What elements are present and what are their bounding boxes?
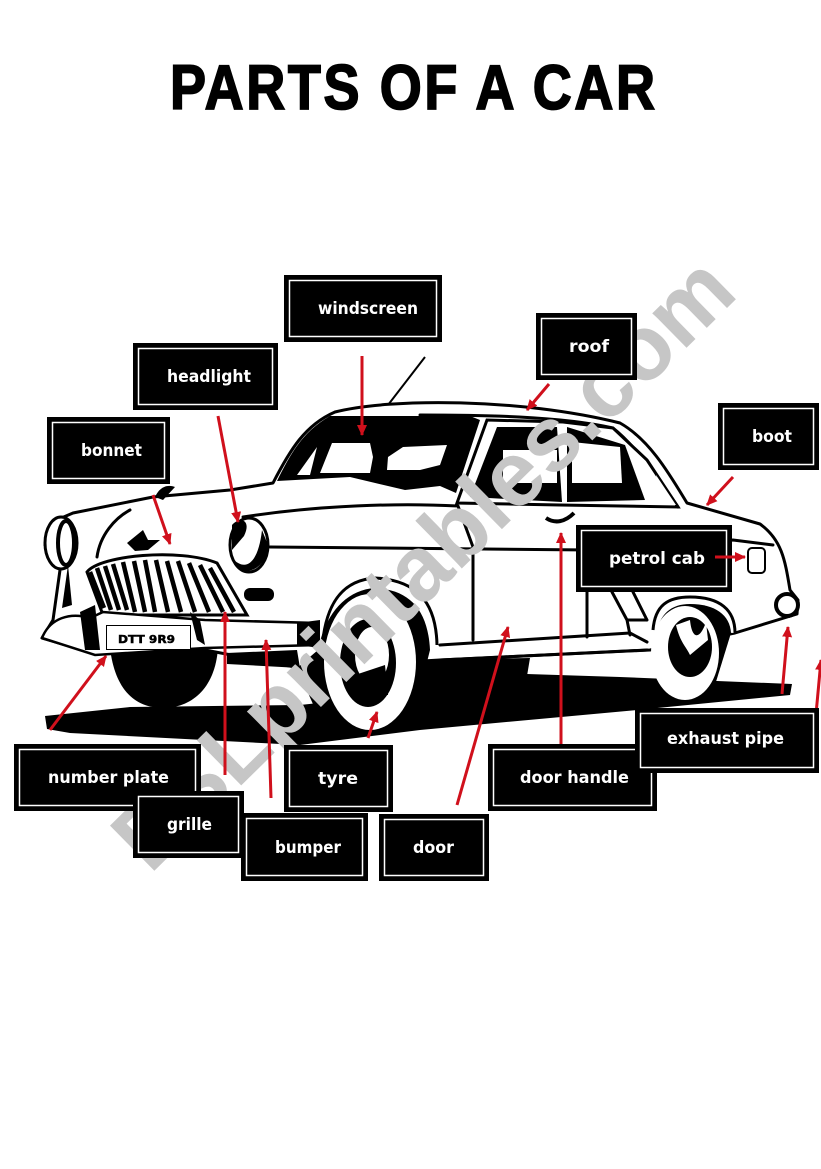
hood ornament xyxy=(127,530,160,551)
label: number plate xyxy=(14,744,201,811)
title: PARTS OF A CAR xyxy=(170,53,655,123)
number plate: DTT 9R9 xyxy=(118,633,175,646)
arrow: bumper xyxy=(266,640,271,798)
label: bumper: bumper xyxy=(275,838,342,858)
label: bonnet xyxy=(47,417,170,484)
label: number plate: number plate xyxy=(48,768,169,788)
label: exhaust pipe: exhaust pipe xyxy=(667,729,784,749)
door handle xyxy=(546,513,574,521)
arrow: roof xyxy=(527,384,549,410)
arrow: number plate xyxy=(50,656,106,730)
arrow: door handle xyxy=(560,533,562,745)
rear quarter glass xyxy=(656,475,676,505)
arrow: windscreen xyxy=(360,356,364,435)
car illustration xyxy=(42,357,798,745)
windscreen frame xyxy=(277,416,480,493)
arrow: exhaust pipe xyxy=(782,627,788,694)
hidden rear-side wheel xyxy=(405,658,530,725)
label: petrol cab xyxy=(576,525,732,592)
label: headlight xyxy=(133,343,278,410)
rear wheel xyxy=(651,597,735,700)
label: grille: grille xyxy=(167,815,212,835)
label: door handle xyxy=(488,744,657,811)
label: tyre: tyre xyxy=(318,769,358,789)
grille xyxy=(87,555,247,615)
fuel cap xyxy=(748,548,765,573)
label: bonnet: bonnet xyxy=(81,441,142,461)
label: grille xyxy=(133,791,244,858)
arrow: grille xyxy=(224,612,226,775)
label: boot xyxy=(718,403,819,470)
arrow: headlight xyxy=(218,416,238,522)
arrow: tyre xyxy=(368,712,377,738)
rear bumper xyxy=(776,594,798,616)
number plate xyxy=(106,626,190,650)
arrow: boot xyxy=(707,477,733,505)
label: bumper xyxy=(241,813,368,881)
label: roof: roof xyxy=(569,337,610,357)
body lines xyxy=(270,540,773,550)
arrow: door xyxy=(457,627,508,805)
front hidden wheel xyxy=(110,648,218,708)
car body xyxy=(42,403,798,668)
front door window xyxy=(470,427,562,502)
label: windscreen: windscreen xyxy=(318,299,418,319)
label: petrol cab: petrol cab xyxy=(609,549,705,569)
rear door window xyxy=(567,427,645,502)
label: windscreen xyxy=(284,275,442,342)
fender line xyxy=(97,510,130,557)
arrow: petrol cab xyxy=(715,556,745,558)
ground shadow xyxy=(45,674,792,745)
right headlight xyxy=(230,518,268,572)
label: headlight: headlight xyxy=(167,367,251,387)
front bumper xyxy=(42,612,318,655)
label: door xyxy=(379,814,489,881)
arrow: bonnet xyxy=(153,495,170,544)
label: door: door xyxy=(413,838,455,858)
left headlight xyxy=(45,517,77,569)
label: roof xyxy=(536,313,637,380)
label: exhaust pipe xyxy=(635,708,819,773)
watermark: ESLprintables.com xyxy=(93,237,754,889)
windscreen glass xyxy=(297,443,447,475)
rocker panel xyxy=(440,633,647,660)
antenna xyxy=(388,357,425,405)
side window frame xyxy=(457,420,678,507)
label: boot: boot xyxy=(752,427,792,447)
roof inner line xyxy=(420,415,678,507)
label: door handle: door handle xyxy=(520,768,629,788)
arrow: edge xyxy=(815,660,821,725)
label: tyre xyxy=(284,745,393,812)
side light xyxy=(244,588,274,601)
front wheel xyxy=(297,578,437,730)
